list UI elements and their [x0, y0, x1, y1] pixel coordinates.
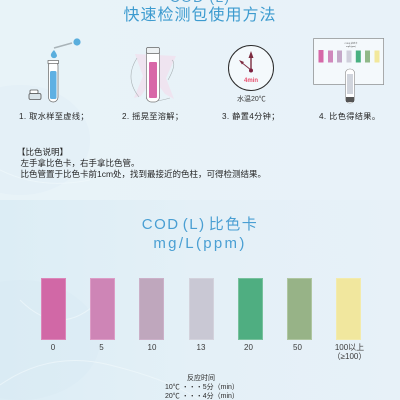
icon: step 2 shaking tube — [130, 47, 176, 102]
label 100+: （≥100） — [333, 352, 366, 361]
swatch 13 — [188, 278, 214, 340]
icon: step 4 mini colour card — [313, 38, 384, 104]
label 50: 50 — [293, 342, 302, 352]
heading: unit: mg/L(ppm) — [153, 235, 247, 252]
cap — [29, 90, 41, 100]
icon: step 4 mini colour card: mg/L(ppm) — [346, 46, 356, 48]
label 10: 10 — [148, 342, 156, 352]
label 20: 20 — [244, 342, 253, 352]
swatch 10 — [139, 278, 164, 340]
label 0: 0 — [51, 342, 55, 352]
text block: colour comparison instructions — [17, 147, 266, 179]
text: step 2: 2. 摇晃至溶解； — [122, 112, 183, 120]
text block: colour comparison instructions: 【比色说明】 — [17, 147, 68, 157]
label 100+ — [333, 342, 366, 361]
text: step 3: 3. 静置4分钟； — [222, 112, 280, 120]
text block: colour comparison instructions: 左手拿比色卡，右手拿比色管。 — [20, 158, 140, 168]
text: reaction time: 反应时间 — [187, 375, 215, 382]
text: water temperature: 水温20℃ — [237, 96, 266, 103]
icon: step 1 tube and dropper — [28, 38, 81, 102]
text: reaction time at 20C: 20℃ ・・・4分（min） — [165, 393, 239, 400]
label: 4min: 4min — [244, 78, 258, 84]
text: step 1: 1. 取水样至虚线； — [19, 112, 89, 120]
text: step 4: 4. 比色得结果。 — [319, 112, 380, 120]
icon: step 3 clock — [228, 45, 274, 91]
label 13: 13 — [197, 342, 205, 352]
text block: colour comparison instructions: 比色管置于比色卡前1cm处，找到最接近的色柱，可得检测结果。 — [20, 169, 266, 179]
label 5: 5 — [99, 342, 104, 352]
text: reaction time at 10C: 10℃ ・・・5分（min） — [165, 384, 239, 390]
swatch 50 — [287, 278, 312, 340]
swatch 100+ — [336, 278, 361, 340]
heading: COD (L) colour chart: COD (L) 比色卡 — [142, 216, 258, 232]
label 100+: 100以上 — [335, 342, 364, 352]
test tube — [48, 60, 58, 102]
swatch 0 — [40, 278, 66, 340]
icon: step 4 mini colour card: COD(L)比色卡 — [345, 41, 357, 45]
dropper — [51, 38, 81, 58]
title: quick kit usage: 快速检测包使用方法 — [123, 7, 276, 24]
swatch 20 — [238, 278, 262, 340]
swatch 5 — [90, 278, 115, 340]
